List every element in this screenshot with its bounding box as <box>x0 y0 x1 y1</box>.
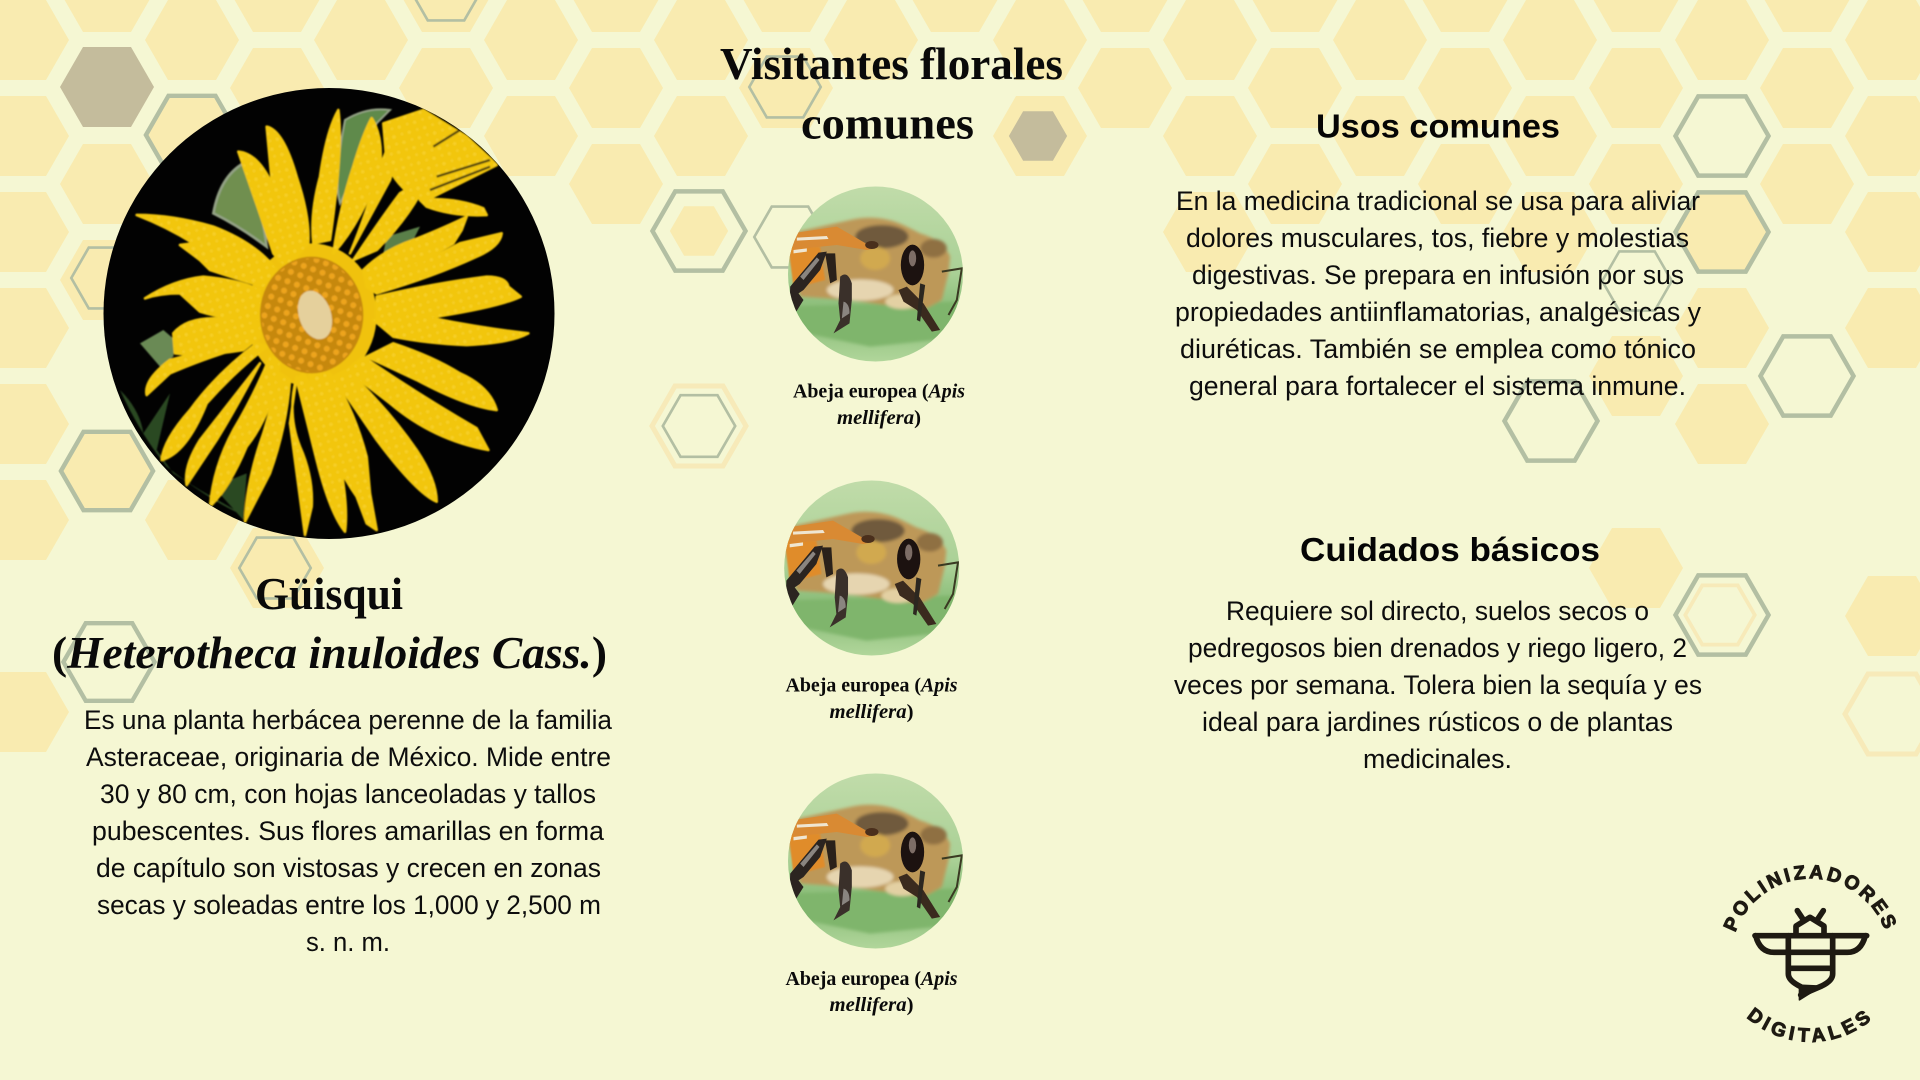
text block: plant description: Asteraceae, originaria de México. Mide entre <box>86 742 611 772</box>
decorative hexagon accents <box>60 0 1920 754</box>
caption: bee 3 <box>786 968 958 1016</box>
text block: usos comunes: diuréticas. También se emplea como tónico <box>1180 334 1696 364</box>
text block: cuidados básicos: medicinales. <box>1363 744 1512 774</box>
text block: plant description: Es una planta herbácea perenne de la familia <box>84 705 612 735</box>
photo: bee 1 <box>787 185 967 363</box>
flower buds and leaves <box>120 109 420 520</box>
text block: cuidados básicos: pedregosos bien drenados y riego ligero, 2 <box>1188 633 1687 663</box>
heading: plant name: (Heterotheca inuloides Cass.) <box>52 628 607 678</box>
photo: bee 2 <box>783 479 963 657</box>
heading: plant name <box>52 569 607 678</box>
text block: cuidados básicos <box>1174 596 1702 774</box>
text block: plant description: de capítulo son vistosas y crecen en zonas <box>96 853 601 883</box>
photo: bee 3 <box>787 772 967 950</box>
petal bases <box>247 243 377 387</box>
heading: usos comunes: Usos comunes <box>1316 108 1560 144</box>
heading: visitantes florales: Visitantes florales <box>720 39 1063 89</box>
caption: bee 1: Abeja europea (Apis <box>793 380 965 402</box>
heading: plant name: Güisqui <box>255 569 403 619</box>
text block: plant description <box>84 705 612 957</box>
caption: bee 1 <box>793 380 965 429</box>
petals <box>137 110 528 535</box>
text block: usos comunes: propiedades antiinflamatorias, analgésicas y <box>1175 297 1702 327</box>
text block: plant description: pubescentes. Sus flores amarillas en forma <box>92 816 604 846</box>
text block: cuidados básicos: ideal para jardines rústicos o de plantas <box>1202 707 1673 737</box>
caption: bee 3: Abeja europea (Apis <box>786 968 958 990</box>
heading: visitantes florales <box>720 39 1063 148</box>
text block: usos comunes: dolores musculares, tos, fiebre y molestias <box>1186 223 1689 253</box>
caption: bee 2: mellifera) <box>830 701 914 723</box>
logo arc text: bottom: DIGITALES <box>1746 1006 1870 1043</box>
text block: usos comunes: digestivas. Se prepara en infusión por sus <box>1192 260 1684 290</box>
logo arc text: top: POLINIZADORES <box>1722 864 1896 932</box>
text block: usos comunes <box>1175 186 1702 401</box>
flower disc <box>260 257 363 373</box>
heading: cuidados básicos: Cuidados básicos <box>1300 531 1600 568</box>
caption: bee 2: Abeja europea (Apis <box>786 674 958 696</box>
text block: plant description: s. n. m. <box>306 927 390 957</box>
caption: bee 2 <box>786 674 958 723</box>
text block: usos comunes: general para fortalecer el sistema inmune. <box>1189 371 1686 401</box>
caption: bee 3: mellifera) <box>830 994 914 1016</box>
text block: cuidados básicos: veces por semana. Tolera bien la sequía y es <box>1174 670 1702 700</box>
honeycomb background pattern <box>0 0 1920 752</box>
text block: cuidados básicos: Requiere sol directo, suelos secos o <box>1226 596 1649 626</box>
text block: plant description: 30 y 80 cm, con hojas lanceoladas y tallos <box>100 779 596 809</box>
text block: usos comunes: En la medicina tradicional se usa para aliviar <box>1176 186 1700 216</box>
caption: bee 1: mellifera) <box>837 407 921 429</box>
text block: plant description: secas y soleadas entre los 1,000 y 2,500 m <box>97 890 601 920</box>
logo bee icon <box>1755 911 1867 1000</box>
logo: polinizadores digitales <box>1722 864 1896 1043</box>
heading: visitantes florales: comunes <box>801 98 974 148</box>
photo: yellow güisqui flower in circle <box>104 88 554 539</box>
